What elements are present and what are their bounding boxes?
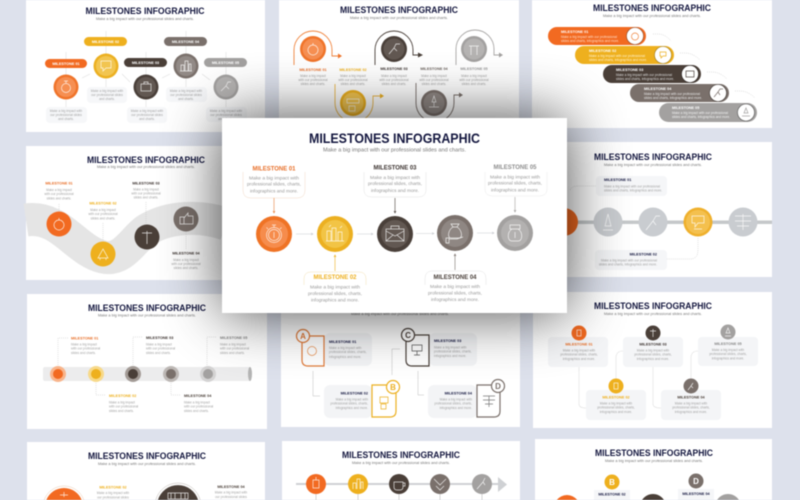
milestone 03 bar — [603, 65, 727, 83]
milestone 02 pill node — [84, 37, 127, 103]
milestone 05 marker: MILESTONE 05 — [220, 336, 247, 340]
milestone 03 stop: with our professional — [131, 192, 161, 196]
milestone 02 callout: MILESTONE 02 — [630, 252, 657, 256]
dark circle — [642, 494, 664, 500]
milestone 03 bar: MILESTONE 03 — [616, 68, 643, 72]
milestone 02 label: Make a big impact with — [97, 491, 129, 495]
milestone 04 node: MILESTONE 04 — [434, 274, 477, 281]
milestone 01 bar: slides and charts, infographics and more. — [561, 39, 619, 43]
milestone 04 stop: Make a big impact — [173, 258, 199, 262]
milestone 03 pill node — [124, 58, 167, 123]
milestone 03 box: professional slides, charts, — [634, 352, 672, 356]
milestone 05 pill node: MILESTONE 05 — [212, 61, 239, 65]
panel: pill labels slide — [26, 0, 265, 132]
milestone 04 label: MILESTONE 04 — [217, 485, 246, 489]
milestone 02 callout — [595, 238, 698, 270]
milestone 01 loop: slides and charts. — [301, 82, 326, 86]
milestone 04 label: Make a big impact with — [215, 490, 247, 494]
milestone 02 loop — [335, 68, 384, 122]
panel: looping arrows slide — [279, 0, 519, 122]
milestone 01 loop — [294, 31, 342, 86]
card A: Make a big impact with — [329, 346, 362, 350]
subtitle: slide 10: Make a big impact with our professional slides and charts. — [352, 460, 450, 465]
milestone 02 marker: slides and charts. — [109, 409, 134, 413]
card C: professional slides, charts, — [434, 350, 472, 354]
card A: infographics and more. — [329, 355, 362, 359]
arrow 02 — [334, 255, 336, 271]
card A: professional slides, charts, — [329, 350, 367, 354]
milestone 05 pill node — [204, 58, 247, 122]
card B: MILESTONE 02 — [341, 392, 368, 396]
milestone 02 node: Make a big impact with — [310, 284, 360, 290]
panel: pipe timeline slide — [27, 294, 267, 429]
heading: slide 3: MILESTONES INFOGRAPHIC — [593, 3, 711, 14]
timeline node 2 — [348, 474, 368, 494]
subtitle: slide 7: Make a big impact with our professional slides and charts. — [351, 311, 449, 316]
milestone 02 stop: MILESTONE 02 — [89, 202, 117, 206]
milestone 05 box: MILESTONE 05 — [714, 342, 742, 346]
milestone 03 pill node: MILESTONE 03 — [132, 61, 159, 65]
card A — [296, 330, 372, 366]
subtitle: slide 11: Make a big impact with our professional slides and charts. — [605, 458, 703, 463]
milestone 01 marker: slides and charts. — [71, 351, 96, 355]
milestone 05 box: Make a big impact with — [712, 348, 744, 352]
card A: MILESTONE 01 — [329, 340, 356, 344]
milestone 01 marker — [50, 336, 101, 382]
subtitle: slide 2: Make a big impact with our professional slides and charts. — [350, 15, 448, 20]
milestone 02 pill node: Make a big impact with — [91, 89, 123, 93]
milestone 02 pill node: MILESTONE 02 — [92, 40, 119, 44]
milestone 04 box — [661, 378, 721, 420]
milestone 01 node: professional slides, charts, — [247, 182, 301, 188]
heading: slide 10: MILESTONES INFOGRAPHIC — [342, 450, 460, 461]
timeline node 3 — [389, 474, 409, 494]
card A: A — [300, 332, 306, 341]
milestone 04 bar — [630, 84, 755, 102]
milestone 02 node: professional slides, charts, — [308, 291, 362, 297]
track node: rocket — [594, 208, 622, 236]
milestone 03 node: professional slides, charts, — [368, 181, 422, 187]
milestone 02 stop — [88, 202, 118, 266]
milestone 04 box: MILESTONE 04 — [677, 396, 706, 400]
card B: infographics and more. — [336, 406, 368, 410]
milestone 04 marker: with our professional — [184, 404, 214, 408]
milestone 02 stop: slides and charts. — [91, 216, 116, 220]
icon: money bag and hand — [446, 224, 463, 243]
icon: bar blocks — [326, 225, 344, 241]
milestone 05 marker: with our professional — [220, 346, 250, 350]
subtitle: slide 9: Make a big impact with our professional slides and charts. — [98, 461, 196, 466]
arrow 03 — [394, 198, 396, 213]
timeline node 4 — [430, 474, 450, 494]
milestone 01 callout: MILESTONE 01 — [604, 178, 631, 182]
milestone 05 pill node: and charts. — [218, 117, 234, 121]
milestone 03 loop: Make a big impact — [381, 74, 407, 78]
milestone 01 stop: slides and charts. — [47, 196, 72, 200]
milestone 04 pill node: Make a big impact with — [170, 89, 202, 93]
milestone 04 marker: slides and charts. — [184, 409, 209, 413]
connector lines: slide 1 — [66, 31, 226, 107]
milestone 02 box: Make a big impact with — [600, 402, 632, 406]
track node: orange — [550, 208, 578, 236]
milestone 03 node: MILESTONE 03 — [374, 164, 417, 172]
card D: MILESTONE 04 — [445, 392, 473, 396]
card D: Make a big impact with — [440, 398, 472, 402]
center panel shadow — [222, 118, 567, 313]
milestone 04 box: Make a big impact with — [675, 402, 707, 406]
milestone 04 loop: with our professional — [419, 78, 449, 82]
card B: Make a big impact with — [336, 398, 368, 402]
panel: lettered cards slide — [281, 300, 520, 427]
milestone 05 box: professional slides, charts, — [709, 352, 747, 356]
milestone 01 box: Make a big impact with — [563, 348, 595, 352]
panel: horizontal track slide — [550, 142, 772, 277]
heading: slide 5: MILESTONES INFOGRAPHIC — [594, 152, 712, 163]
milestone 03 stop: MILESTONE 03 — [132, 182, 160, 186]
card C — [402, 328, 477, 366]
milestone 05 node: MILESTONE 05 — [494, 164, 537, 171]
milestone 02 marker: MILESTONE 02 — [109, 394, 136, 398]
milestone 04 pill node: our professional slides — [170, 93, 202, 97]
panel: large circles slide — [27, 442, 265, 500]
milestone 04 node — [425, 215, 486, 303]
panel: flow boxes slide — [533, 292, 772, 428]
icon: briefcase — [386, 226, 404, 241]
milestone 05 node — [485, 164, 547, 251]
milestone 02 marker — [88, 366, 139, 413]
milestone 05 loop — [456, 30, 503, 86]
milestone 05 node: Make a big impact with — [490, 174, 540, 180]
milestone 01 box: MILESTONE 01 — [565, 342, 593, 346]
milestone 01 pill node: and charts. — [58, 117, 74, 121]
track node: network — [728, 208, 758, 236]
main title: MILESTONES INFOGRAPHIC — [309, 131, 480, 146]
milestone 05 loop: with our professional — [459, 78, 489, 82]
card C: MILESTONE 03 — [434, 339, 461, 343]
milestone 03 marker: slides and charts. — [146, 351, 171, 355]
milestone 05 loop: Make a big impact — [461, 74, 487, 78]
milestone 02 stop: with our professional — [88, 212, 118, 216]
milestone 02 callout: Make a big impact with our professional — [601, 258, 657, 262]
heading: slide 6: MILESTONES INFOGRAPHIC — [88, 303, 206, 314]
milestone 01 marker: Make a big impact — [71, 342, 97, 346]
heading: slide 1: MILESTONES INFOGRAPHIC — [86, 6, 205, 17]
milestone 02 loop: Make a big impact — [340, 74, 366, 78]
milestone 02 box: professional slides, charts, — [597, 406, 635, 410]
milestone 03 marker: Make a big impact — [146, 342, 172, 346]
milestone 03 stop — [131, 182, 161, 250]
milestone 05 bar: Make a big impact with our professional — [672, 111, 728, 115]
milestone 02 label: our professional slides — [97, 496, 129, 500]
gray circle — [717, 494, 739, 500]
milestone 02 pill node: our professional slides — [91, 93, 123, 97]
milestone 03 box: MILESTONE 03 — [639, 342, 667, 346]
milestone 01 loop: Make a big impact — [300, 74, 326, 78]
track node: runner — [638, 208, 668, 236]
milestone 03 box — [623, 326, 683, 367]
milestone 05 marker — [200, 336, 250, 382]
heading: slide 9: MILESTONES INFOGRAPHIC — [88, 451, 206, 462]
milestone 01 stop — [44, 182, 74, 236]
milestone 04 pill node — [164, 37, 207, 102]
card D: D — [495, 382, 501, 391]
subtitle: slide 6: Make a big impact with our professional slides and charts. — [98, 312, 196, 318]
milestone 01 bar: MILESTONE 01 — [561, 30, 588, 34]
milestone 03 stop: Make a big impact — [133, 188, 159, 192]
card C: Make a big impact with — [434, 346, 467, 350]
subtitle: slide 1: Make a big impact with our professional slides and charts. — [96, 16, 194, 21]
milestone 03 node: Make a big impact with — [370, 175, 420, 181]
milestone 02 callout: slides and charts, infographics and more. — [599, 262, 657, 266]
milestone 05 bar: MILESTONE 05 — [672, 106, 699, 110]
milestone 05 loop: MILESTONE 05 — [460, 67, 488, 71]
arrow 04 — [454, 254, 456, 270]
milestone 03 marker — [125, 336, 176, 382]
milestone 04 marker: MILESTONE 04 — [184, 394, 212, 398]
milestone 02 box: infographics and more. — [600, 410, 632, 414]
arrow line — [296, 477, 507, 492]
milestone 01 loop: with our professional — [298, 78, 328, 82]
badge B — [594, 474, 630, 500]
milestone 04 stop — [171, 206, 201, 270]
milestone 02 box: MILESTONE 02 — [602, 396, 630, 400]
milestone 02 loop: slides and charts. — [341, 82, 366, 86]
milestone 05 pill node: Make a big impact with — [210, 109, 242, 113]
milestone 01 pill node: Make a big impact with — [50, 109, 82, 113]
card D: professional slides, charts, — [434, 402, 472, 406]
milestone 05 bar: slides and charts, infographics and more. — [672, 115, 730, 119]
milestone 02 loop: with our professional — [338, 78, 368, 82]
track line — [565, 220, 772, 224]
milestone 01 box: infographics and more. — [563, 357, 595, 361]
panel: staircase bars slide — [532, 0, 772, 128]
milestone 01 pill node: MILESTONE 01 — [52, 62, 80, 66]
milestone 04 box: professional slides, charts, — [672, 406, 710, 410]
milestone 02 bar: slides and charts, infographics and more. — [589, 58, 647, 62]
milestone 04 stop: with our professional — [171, 262, 201, 266]
vertical stems — [316, 490, 482, 500]
milestone 01 marker: MILESTONE 01 — [71, 336, 98, 340]
milestone 04 stop: slides and charts. — [174, 266, 199, 270]
heading: slide 11: MILESTONES INFOGRAPHIC — [595, 448, 713, 459]
milestone 01 bar — [548, 27, 671, 45]
milestone 02 bar: Make a big impact with our professional — [589, 54, 645, 58]
milestone 02 node: MILESTONE 02 — [314, 274, 357, 281]
arrows between milestones — [296, 232, 494, 235]
milestone 02 box — [586, 378, 646, 420]
milestone 03 node: infographics and more. — [371, 188, 419, 194]
milestone 05 node: infographics and more. — [491, 188, 539, 194]
milestone 05 node: professional slides, charts, — [488, 180, 542, 186]
milestone 03 stop: slides and charts. — [134, 196, 159, 200]
card D: infographics and more. — [440, 406, 472, 410]
badge B: MILESTONE 02 — [598, 492, 626, 496]
badge D: D — [693, 477, 699, 486]
card B — [324, 380, 400, 418]
milestone 03 node — [364, 164, 426, 252]
milestone 05 box — [698, 324, 758, 366]
badge D: MILESTONE 04 — [682, 492, 711, 496]
milestone 04 node: Make a big impact with — [430, 284, 480, 290]
milestone 01 node: Make a big impact with — [249, 176, 299, 182]
badge D — [678, 474, 714, 500]
milestone 05 bar — [659, 103, 757, 122]
milestone 04 bar: MILESTONE 04 — [644, 87, 672, 91]
milestone 03 box: infographics and more. — [637, 357, 669, 361]
connector lines: slide 7 — [313, 349, 424, 396]
milestone 03 loop: slides and charts. — [382, 82, 407, 86]
milestone 01 callout — [570, 176, 667, 196]
milestone 05 marker: Make a big impact — [220, 342, 246, 346]
milestone 04 node: infographics and more. — [431, 297, 479, 303]
panel: featured milestones slide — [222, 118, 567, 313]
milestone 05 box: infographics and more. — [712, 356, 744, 360]
milestone 02 label — [97, 486, 129, 500]
label card 01 — [243, 172, 305, 198]
milestone 01 pill node: our professional slides — [50, 113, 82, 117]
milestone 03 bar: slides and charts, infographics and more. — [616, 77, 674, 81]
icon: stopwatch — [266, 225, 282, 242]
milestone 01 marker: with our professional — [71, 346, 101, 350]
subtitle: slide 4: Make a big impact with our professional slides and charts. — [97, 164, 195, 169]
milestone 04 stop: MILESTONE 04 — [172, 252, 201, 256]
milestone 01 stop: MILESTONE 01 — [45, 182, 73, 186]
milestone 04 loop: slides and charts. — [422, 82, 447, 86]
milestone 01 stop: with our professional — [44, 192, 74, 196]
milestone 04 pill node: MILESTONE 04 — [172, 40, 200, 44]
milestone 03 loop — [375, 31, 423, 86]
arrow 01 — [273, 198, 275, 213]
milestone 03 loop: MILESTONE 03 — [380, 67, 408, 71]
milestone 01 pill node — [45, 59, 87, 123]
track node: yellow chat — [684, 208, 712, 236]
milestone 04 loop: MILESTONE 04 — [420, 67, 449, 71]
milestone 04 marker — [163, 366, 214, 413]
orange circle — [557, 495, 577, 500]
panel: lettered columns slide — [535, 439, 772, 500]
milestone 04 marker: Make a big impact — [184, 400, 210, 404]
connector lines: slide 8 — [579, 351, 698, 408]
main subtitle: Make a big impact with our professional slides and charts. — [323, 148, 466, 154]
milestone 03 pill node: our professional slides — [131, 113, 163, 117]
card B: professional slides, charts, — [330, 402, 368, 406]
milestone 02 label: MILESTONE 02 — [99, 486, 127, 490]
milestone 04 node: professional slides, charts, — [428, 290, 482, 296]
milestone 01 callout: Make a big impact with our professional — [604, 184, 660, 188]
milestone 04 label: our professional slides — [215, 495, 247, 499]
pipe — [43, 367, 252, 381]
milestone 02 bar — [575, 46, 700, 64]
milestone 02 bar: MILESTONE 02 — [589, 49, 616, 53]
badge B: B — [609, 478, 615, 487]
milestone 01 stop: Make a big impact — [46, 188, 72, 192]
milestone 04 bar: slides and charts, infographics and more. — [644, 96, 702, 100]
milestone 05 loop: slides and charts. — [462, 82, 487, 86]
subtitle: slide 3: Make a big impact with our professional slides and charts. — [603, 13, 701, 18]
milestone 01 node: infographics and more. — [250, 188, 298, 194]
milestone 04 loop — [416, 67, 463, 122]
milestone 04 pill node: and charts. — [178, 97, 194, 101]
icon: money bag — [508, 225, 522, 241]
milestone 03 bar: Make a big impact with our professional — [616, 73, 672, 77]
timeline node 1 — [306, 474, 326, 494]
milestone 05 marker: slides and charts. — [220, 351, 245, 355]
milestone 03 marker: with our professional — [146, 346, 176, 350]
subtitle: slide 5: Make a big impact with our professional slides and charts. — [604, 162, 702, 167]
milestone 03 marker: MILESTONE 03 — [146, 336, 173, 340]
milestone 01 node: MILESTONE 01 — [252, 166, 296, 172]
milestone 03 loop: with our professional — [379, 78, 409, 82]
arrow 05 — [514, 197, 516, 212]
timeline node 5 — [472, 474, 492, 494]
milestone 02 marker: with our professional — [109, 404, 139, 408]
milestone 01 box: professional slides, charts, — [560, 352, 598, 356]
large dark circle — [156, 483, 200, 500]
milestone 04 loop: Make a big impact — [421, 74, 447, 78]
milestone 02 node — [304, 216, 366, 304]
milestone 01 bar: Make a big impact with our professional — [561, 35, 617, 39]
milestone 02 marker: Make a big impact — [109, 400, 135, 404]
heading: slide 2: MILESTONES INFOGRAPHIC — [340, 5, 458, 16]
large orange circle — [44, 486, 84, 500]
heading: slide 4: MILESTONES INFOGRAPHIC — [87, 155, 205, 166]
card C: infographics and more. — [434, 354, 467, 358]
heading: slide 8: MILESTONES INFOGRAPHIC — [594, 301, 712, 312]
panel: arrow line slide — [282, 441, 520, 500]
card B: B — [390, 383, 396, 392]
milestone 04 bar: Make a big impact with our professional — [644, 92, 700, 96]
card D — [428, 380, 504, 418]
milestone 03 pill node: and charts. — [139, 117, 155, 121]
card C: C — [405, 331, 411, 340]
milestone 02 loop: MILESTONE 02 — [339, 68, 367, 72]
milestone 01 box — [548, 326, 608, 367]
milestone 04 box: infographics and more. — [675, 410, 707, 414]
milestone 02 stop: Make a big impact — [90, 208, 116, 212]
milestone 01 loop: MILESTONE 01 — [299, 68, 327, 72]
milestone 03 box: Make a big impact with — [637, 348, 669, 352]
milestone 05 pill node: our professional slides — [210, 113, 242, 117]
milestone 03 pill node: Make a big impact with — [131, 109, 163, 113]
panel: winding road slide — [26, 146, 226, 280]
milestone 02 node: infographics and more. — [311, 298, 359, 304]
subtitle: slide 8: Make a big impact with our professional slides and charts. — [604, 311, 702, 316]
milestone 01 callout: slides and charts, infographics and more. — [604, 188, 662, 192]
milestone 02 pill node: and charts. — [99, 97, 115, 101]
milestone 04 label — [215, 485, 247, 499]
road band — [26, 218, 226, 258]
milestone 01 node — [243, 166, 305, 252]
